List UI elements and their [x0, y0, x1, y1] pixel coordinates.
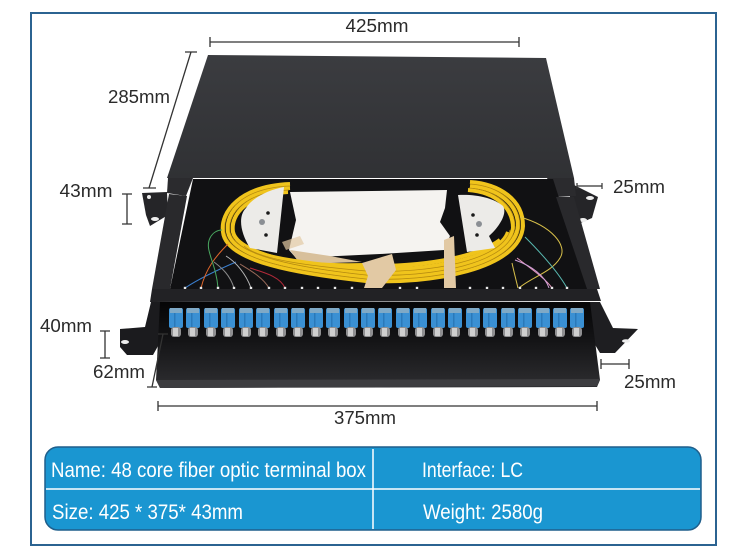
white splice tray	[289, 190, 450, 258]
dimension: 375mm	[158, 401, 597, 428]
LC adapter row	[169, 308, 584, 337]
rack terminal box product photo	[120, 55, 638, 388]
dimension: 40mm: 40mm	[40, 315, 92, 336]
dimension: 40mm	[40, 315, 110, 358]
dimension: 62mm: 62mm	[93, 361, 145, 382]
colored wires right	[512, 217, 567, 288]
cover left corner box	[167, 178, 193, 196]
fiber loop shadow lines	[225, 184, 520, 279]
dimension: lower 25mm	[601, 359, 676, 392]
tray interior	[170, 179, 588, 289]
table dividers	[46, 449, 700, 529]
dimension: lower 25mm: 25mm	[624, 371, 676, 392]
dimension: 285mm	[108, 52, 197, 188]
left body and lower ear	[120, 302, 170, 355]
tape bundles	[282, 236, 456, 288]
wire terminal dots	[184, 287, 568, 289]
cover right corner box	[547, 178, 576, 197]
tray left rail	[152, 194, 187, 289]
specification table	[45, 447, 701, 530]
left fiber spool	[241, 187, 284, 253]
dimension: 425mm	[210, 15, 519, 47]
dimension: 285mm: 285mm	[108, 86, 170, 107]
right fiber spool	[458, 195, 504, 252]
top cover	[167, 55, 574, 178]
tray right rail	[556, 197, 600, 289]
spec: name: Name: 48 core fiber optic terminal box	[51, 459, 366, 482]
fold-down front flap	[156, 302, 600, 388]
dimension: top 25mm	[577, 176, 665, 197]
spec: weight: Weight: 2580g	[423, 501, 543, 524]
dimension: 43mm	[60, 180, 132, 224]
table background	[45, 447, 701, 530]
dimension: 425mm: 425mm	[346, 15, 408, 36]
dimension: 375mm: 375mm	[334, 407, 396, 428]
spec: size: Size: 425 * 375* 43mm	[52, 501, 243, 524]
tan tray edge	[290, 250, 362, 264]
yellow fiber loops	[223, 182, 523, 281]
flap bottom lip	[156, 379, 600, 388]
ear: upper left	[142, 192, 168, 226]
right body and lower ear	[585, 302, 638, 353]
ear: upper right	[570, 183, 598, 224]
colored wires left	[185, 230, 285, 288]
dimension: 62mm	[93, 334, 168, 387]
dimension: top 25mm: 25mm	[613, 176, 665, 197]
spec: interface: Interface: LC	[422, 459, 523, 482]
front panel bar	[150, 289, 601, 302]
dimension: 43mm: 43mm	[60, 180, 112, 201]
